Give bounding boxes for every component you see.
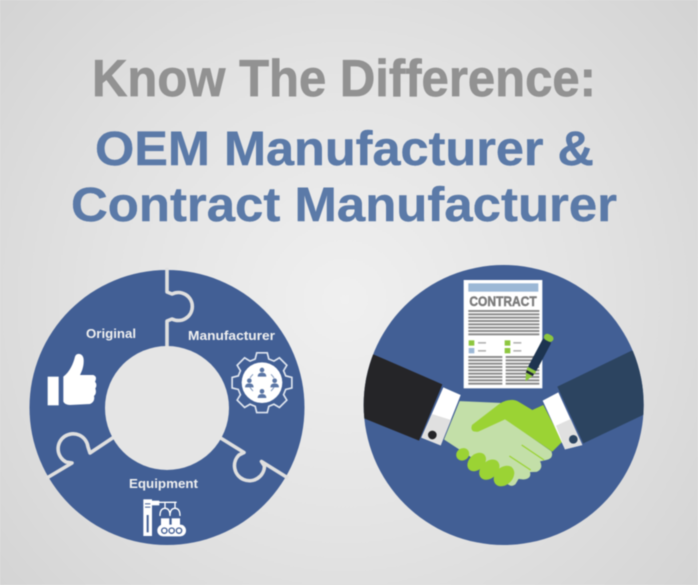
contract heading: CONTRACT: [469, 293, 537, 309]
panel: OEM puzzle wheel: [30, 268, 304, 545]
title: Know The Difference:: [92, 50, 596, 108]
left hand: [445, 402, 552, 485]
label: Equipment: Equipment: [129, 477, 199, 491]
left sleeve: [357, 354, 442, 441]
icon: gear with people: [232, 353, 292, 413]
right cuff: [543, 392, 582, 449]
wheel disc: [30, 270, 304, 545]
subtitle line 2: Contract Manufacturer: [71, 179, 617, 232]
label: Manufacturer: Manufacturer: [188, 329, 275, 343]
label: Original: Original: [86, 327, 136, 341]
wheel centre: [105, 346, 229, 470]
fingertips: [454, 446, 518, 490]
finger creases: [509, 445, 544, 470]
puzzle seams: [46, 268, 288, 481]
right sleeve: [557, 351, 650, 443]
left cuff: [421, 387, 461, 445]
contract text lines: [468, 310, 539, 385]
icon: pen: [521, 333, 555, 384]
icon: factory robot and conveyor: [143, 499, 186, 536]
icon: thumbs up: [48, 354, 96, 405]
right hand: [471, 400, 562, 452]
circle backdrop: [364, 265, 644, 545]
subtitle line 1: OEM Manufacturer &: [95, 123, 594, 176]
contract document: [464, 280, 542, 388]
panel: contract handshake: [357, 265, 650, 545]
